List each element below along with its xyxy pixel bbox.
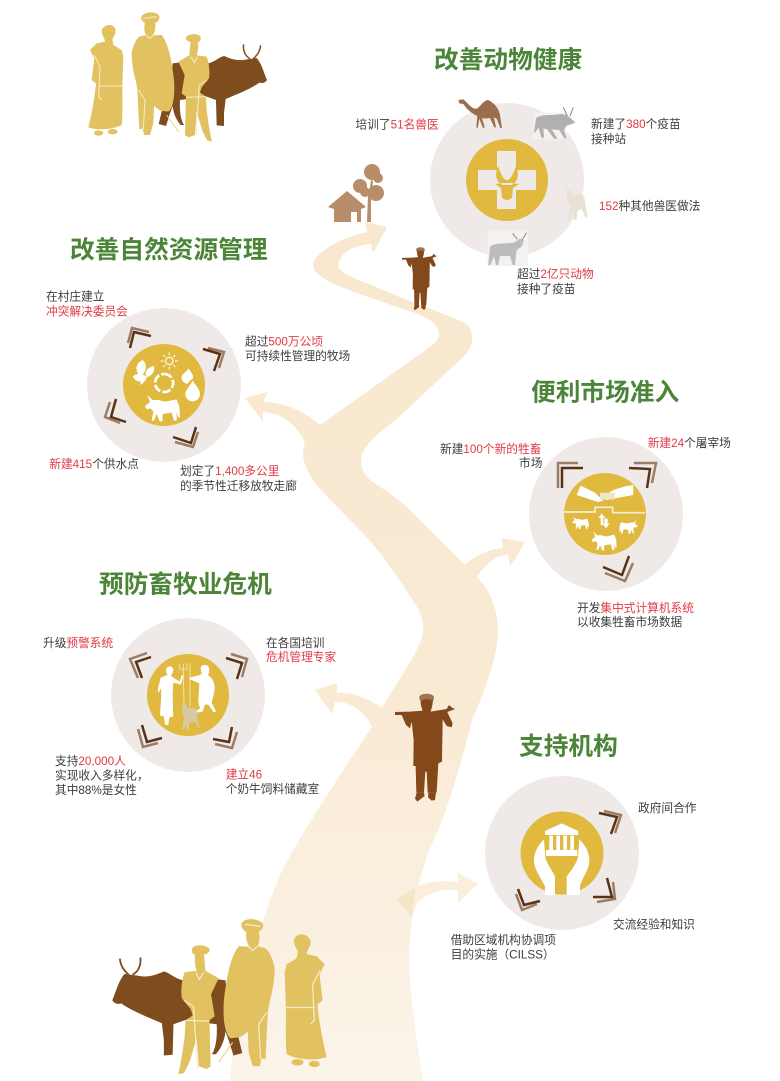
label: computer system: 开发集中式计算机系统 bbox=[577, 602, 694, 615]
heading: animal health: 改善动物健康 bbox=[434, 46, 582, 74]
panel circle bbox=[430, 103, 584, 257]
label: crisis experts: 在各国培训 bbox=[266, 637, 324, 650]
chevrons bbox=[558, 463, 656, 581]
panel circle bbox=[485, 776, 639, 930]
heading: natural resources: 改善自然资源管理 bbox=[70, 236, 268, 264]
label: intergovernmental cooperation: 政府间合作 bbox=[638, 801, 697, 815]
label: vaccination stations: 接种站 bbox=[591, 132, 626, 146]
label: managed rangeland: 可持续性管理的牧场 bbox=[245, 349, 350, 363]
label: income diversification: 实现收入多样化， bbox=[55, 768, 149, 782]
panel: supporting institutions bbox=[451, 732, 697, 962]
icon: market exchange bbox=[564, 473, 646, 555]
label: managed rangeland: 超过500万公顷 bbox=[245, 336, 323, 348]
heading: market access: 便利市场准入 bbox=[531, 378, 679, 406]
label: income diversification: 其中88%是女性 bbox=[55, 783, 137, 797]
label: vaccination stations: 新建了380个疫苗 bbox=[591, 118, 681, 131]
heading: institutions: 支持机构 bbox=[519, 732, 618, 760]
label: conflict committees: 冲突解决委员会 bbox=[46, 304, 128, 318]
label: veterinary practices: 152种其他兽医做法 bbox=[599, 199, 700, 213]
label: vets: 培训了51名兽医 bbox=[356, 118, 439, 132]
label: exchange of knowledge: 交流经验和知识 bbox=[613, 918, 695, 932]
label: livestock markets: 市场 bbox=[519, 456, 542, 470]
label: slaughterhouses: 新建24个屠宰场 bbox=[648, 436, 731, 450]
icon: grey ox bbox=[488, 230, 528, 266]
icon: walking herder lower bbox=[395, 694, 455, 802]
label: vaccinated animals: 接种了疫苗 bbox=[517, 282, 576, 296]
icon: cross with bull bbox=[466, 139, 548, 221]
panel circle bbox=[87, 308, 241, 462]
icon: herders and goat bbox=[147, 654, 229, 736]
icon: zebu cow bbox=[533, 107, 575, 139]
label: regional coordination: 借助区域机构协调项 bbox=[451, 934, 556, 947]
label: income diversification: 支持20,000人 bbox=[55, 755, 126, 768]
label: feed stores: 建立46 bbox=[226, 768, 262, 782]
label: corridors: 划定了1,400多公里 bbox=[180, 465, 279, 478]
label: vaccinated animals: 超过2亿只动物 bbox=[517, 268, 594, 281]
heading: crisis prevention: 预防畜牧业危机 bbox=[99, 570, 272, 598]
icon: camel bbox=[458, 99, 502, 128]
arrow to support institutions bbox=[397, 873, 478, 917]
top figures: herders and cow bbox=[88, 12, 267, 142]
panel circle bbox=[529, 437, 683, 591]
label: livestock markets: 新建100个新的牲畜 bbox=[440, 443, 541, 456]
label: conflict committees: 在村庄建立 bbox=[46, 290, 104, 304]
icon: walking herder upper bbox=[402, 247, 437, 310]
panel: market access bbox=[440, 378, 731, 629]
icon: goat bbox=[566, 187, 588, 221]
label: water points: 新建415个供水点 bbox=[49, 457, 139, 471]
panel: natural resource management bbox=[46, 236, 350, 493]
label: corridors: 的季节性迁移放牧走廊 bbox=[180, 479, 297, 493]
icon: nature cycle bbox=[123, 344, 205, 426]
label: early warning: 升级预警系统 bbox=[43, 636, 113, 650]
label: regional coordination: 目的实施（CILSS） bbox=[451, 948, 555, 962]
icon: house and tree bbox=[328, 164, 384, 222]
label: feed stores: 个奶牛饲料储藏室 bbox=[226, 782, 320, 796]
label: crisis experts: 危机管理专家 bbox=[266, 650, 336, 664]
chevrons bbox=[105, 328, 224, 447]
panel circle bbox=[111, 618, 265, 772]
icon: hands holding temple bbox=[520, 812, 604, 895]
label: computer system: 以收集牲畜市场数据 bbox=[577, 615, 683, 629]
panel: crisis prevention bbox=[43, 570, 336, 797]
panel: animal health bbox=[356, 46, 700, 296]
chevrons bbox=[516, 811, 621, 910]
bottom figures: cow and herders bbox=[112, 919, 327, 1074]
road with branching arrows bbox=[230, 222, 525, 1081]
chevrons bbox=[130, 653, 247, 748]
